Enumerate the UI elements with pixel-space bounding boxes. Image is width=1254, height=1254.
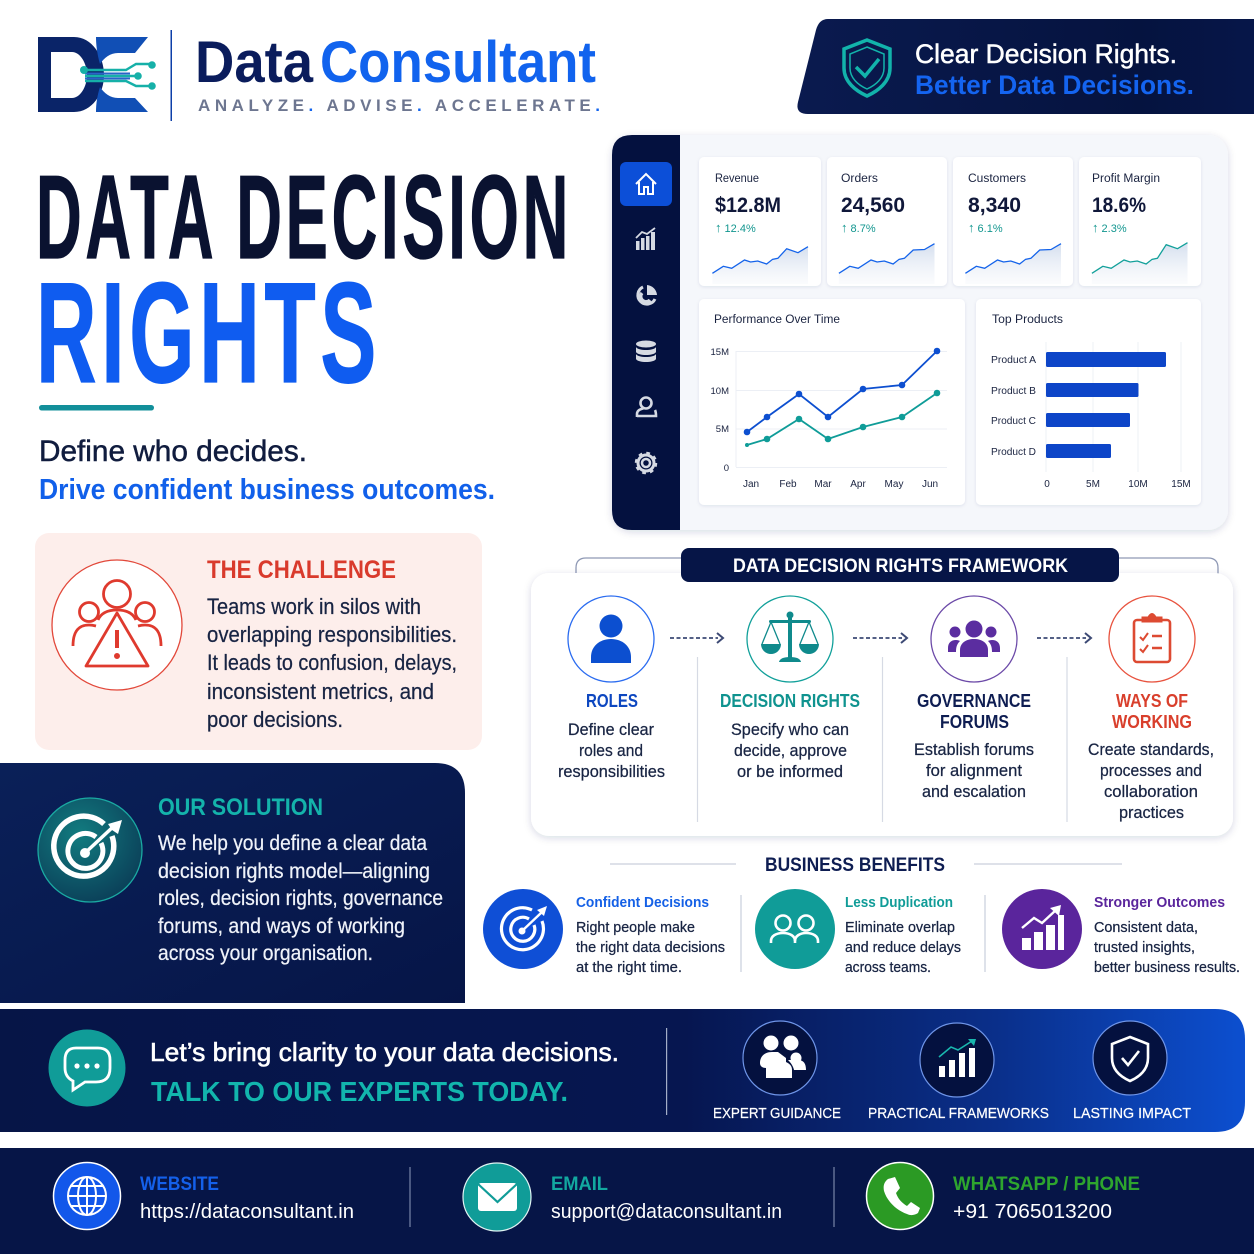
contact: email: EMAIL bbox=[551, 1174, 608, 1195]
bar chart: top products: 15M bbox=[1171, 479, 1191, 490]
bar chart: top products: 10M bbox=[1128, 479, 1148, 490]
card: customers bbox=[953, 157, 1073, 286]
bar chart: top products: Product A bbox=[991, 355, 1036, 366]
contact: website bbox=[54, 1162, 354, 1230]
benefit: less duplication: and reduce delays bbox=[845, 940, 961, 956]
panel: dashboard bbox=[612, 135, 1228, 530]
benefits heading: BUSINESS BENEFITS bbox=[765, 854, 945, 876]
step: governance forums: for alignment bbox=[926, 761, 1022, 780]
benefit: stronger outcomes: trusted insights, bbox=[1094, 940, 1195, 956]
line chart: performance over time: Mar bbox=[814, 479, 832, 490]
contact: whatsapp phone: +91 7065013200 bbox=[953, 1201, 1112, 1223]
framework title: DATA DECISION RIGHTS FRAMEWORK bbox=[733, 555, 1068, 577]
card: customers: 8,340 bbox=[968, 194, 1021, 217]
logo wordmark bbox=[195, 30, 596, 95]
solution heading: OUR SOLUTION bbox=[158, 794, 323, 821]
line chart: performance over time: Feb bbox=[779, 479, 797, 490]
logo wordmark: Consultant bbox=[320, 30, 596, 95]
step: ways of working bbox=[1088, 596, 1214, 822]
benefit: confident decisions: Right people make bbox=[576, 920, 695, 936]
main title bbox=[36, 151, 572, 413]
benefit: less duplication bbox=[755, 889, 961, 976]
badge: clear decision rights bbox=[797, 19, 1254, 114]
step: governance forums: FORUMS bbox=[940, 712, 1009, 732]
benefit: stronger outcomes: Consistent data, bbox=[1094, 920, 1198, 936]
call to action text: Let’s bring clarity to your data decisions. bbox=[150, 1037, 619, 1067]
bar chart: top products: Product B bbox=[991, 386, 1036, 397]
benefit: confident decisions: the right data decisions bbox=[576, 940, 725, 956]
footer: contact bbox=[0, 1148, 1254, 1254]
step: ways of working: WAYS OF bbox=[1116, 691, 1188, 711]
logo: Data Consultant bbox=[38, 30, 600, 121]
subtitle bbox=[39, 435, 495, 506]
benefit: confident decisions: at the right time. bbox=[576, 960, 682, 976]
line chart: performance over time: 15M bbox=[711, 347, 729, 358]
line chart: performance over time: 5M bbox=[716, 424, 729, 435]
framework title bbox=[681, 548, 1119, 582]
step: decision rights: or be informed bbox=[737, 762, 843, 781]
logo wordmark: Data bbox=[195, 30, 314, 95]
icon: home bbox=[636, 174, 656, 194]
benefit: less duplication: Eliminate overlap bbox=[845, 920, 955, 936]
subtitle: Drive confident business outcomes. bbox=[39, 474, 495, 506]
benefit: less duplication: across teams. bbox=[845, 960, 931, 976]
feature: lasting impact: LASTING IMPACT bbox=[1073, 1106, 1191, 1122]
contact: website: https://dataconsultant.in bbox=[140, 1201, 354, 1223]
line chart: performance over time: May bbox=[885, 479, 903, 490]
solution text: forums, and ways of working bbox=[158, 915, 405, 938]
solution text: roles, decision rights, governance bbox=[158, 887, 443, 910]
dashboard sidebar bbox=[612, 135, 680, 530]
call to action text bbox=[150, 1037, 619, 1107]
contact: website: WEBSITE bbox=[140, 1174, 219, 1195]
card: orders: ↑ 8.7% bbox=[841, 220, 876, 235]
step: decision rights: Specify who can bbox=[731, 720, 849, 739]
card: profit margin: ↑ 2.3% bbox=[1092, 220, 1127, 235]
bar chart: top products: 5M bbox=[1086, 479, 1100, 490]
challenge text: inconsistent metrics, and bbox=[207, 679, 434, 704]
benefit: stronger outcomes bbox=[1002, 889, 1240, 976]
logo tagline: ANALYZE . ADVISE . ACCELERATE . bbox=[198, 96, 600, 115]
benefit: confident decisions bbox=[483, 889, 725, 976]
step: ways of working: Create standards, bbox=[1088, 740, 1214, 759]
line chart: performance over time: Jun bbox=[922, 479, 938, 490]
icon: database bbox=[636, 340, 656, 362]
benefit: confident decisions: Confident Decisions bbox=[576, 895, 709, 911]
step: governance forums: and escalation bbox=[922, 782, 1026, 801]
step: ways of working: WORKING bbox=[1112, 712, 1192, 732]
step: roles: ROLES bbox=[586, 691, 638, 711]
step: governance forums: Establish forums bbox=[914, 740, 1034, 759]
card: revenue: $12.8M bbox=[715, 194, 781, 217]
step: ways of working: collaboration bbox=[1104, 782, 1198, 801]
step: ways of working: processes and bbox=[1100, 761, 1202, 780]
icon: bar chart bbox=[636, 228, 655, 250]
bar chart: top products: Product D bbox=[991, 447, 1036, 458]
call to action text: TALK TO OUR EXPERTS TODAY. bbox=[151, 1076, 568, 1107]
line chart: performance over time: 10M bbox=[711, 386, 729, 397]
step: decision rights: decide, approve bbox=[734, 741, 847, 760]
benefit: stronger outcomes: better business results. bbox=[1094, 960, 1240, 976]
bar chart: top products: Top Products bbox=[992, 314, 1063, 326]
main title: RIGHTS bbox=[36, 254, 381, 413]
challenge text: overlapping responsibilities. bbox=[207, 622, 457, 647]
badge text bbox=[915, 39, 1194, 100]
benefit: less duplication: Less Duplication bbox=[845, 895, 953, 911]
icon: target bbox=[38, 798, 142, 902]
card: profit margin: Profit Margin bbox=[1092, 173, 1160, 185]
challenge text bbox=[207, 594, 457, 732]
solution text: decision rights model—aligning bbox=[158, 860, 430, 883]
line chart: performance over time: Jan bbox=[743, 479, 759, 490]
icon: DC monogram bbox=[38, 37, 156, 112]
feature: practical frameworks bbox=[868, 1023, 1049, 1122]
section: business benefits bbox=[483, 854, 1240, 976]
step: roles: roles and bbox=[579, 741, 643, 760]
challenge text: It leads to confusion, delays, bbox=[207, 650, 457, 675]
step: roles bbox=[558, 596, 665, 781]
step: governance forums bbox=[914, 596, 1034, 801]
feature: expert guidance: EXPERT GUIDANCE bbox=[713, 1106, 841, 1122]
badge text: Better Data Decisions. bbox=[915, 70, 1194, 100]
card: revenue bbox=[699, 157, 821, 286]
card: revenue: ↑ 12.4% bbox=[715, 220, 756, 235]
card: customers: Customers bbox=[968, 173, 1026, 185]
panel: framework bbox=[531, 548, 1233, 836]
solution text bbox=[158, 832, 443, 965]
feature: practical frameworks: PRACTICAL FRAMEWORKS bbox=[868, 1106, 1049, 1122]
bar chart: top products bbox=[976, 299, 1201, 505]
card: revenue: Revenue bbox=[715, 173, 759, 185]
benefit: stronger outcomes: Stronger Outcomes bbox=[1094, 895, 1225, 911]
arrows between steps bbox=[670, 633, 1091, 643]
step: governance forums: GOVERNANCE bbox=[917, 691, 1031, 711]
line chart: performance over time: Performance Over Time bbox=[714, 314, 840, 326]
bar chart: top products: 0 bbox=[1044, 479, 1050, 490]
panel: the challenge bbox=[35, 533, 482, 750]
challenge heading: THE CHALLENGE bbox=[207, 556, 396, 584]
icon: chat bubble bbox=[48, 1030, 126, 1106]
line chart: performance over time: Apr bbox=[850, 479, 866, 490]
banner: call to action bbox=[0, 1009, 1245, 1132]
line chart: performance over time: 0 bbox=[724, 463, 729, 474]
challenge text: Teams work in silos with bbox=[207, 594, 421, 619]
icon: user bbox=[637, 398, 656, 417]
feature: lasting impact bbox=[1073, 1021, 1191, 1122]
step: roles: responsibilities bbox=[558, 762, 665, 781]
subtitle: Define who decides. bbox=[39, 435, 307, 468]
card: orders: Orders bbox=[841, 173, 878, 185]
solution text: We help you define a clear data bbox=[158, 832, 427, 855]
step: decision rights: DECISION RIGHTS bbox=[720, 691, 860, 711]
main title: DATA DECISION bbox=[36, 151, 572, 284]
card: customers: ↑ 6.1% bbox=[968, 220, 1003, 235]
card: orders bbox=[827, 157, 947, 286]
badge text: Clear Decision Rights. bbox=[915, 39, 1177, 69]
feature: expert guidance bbox=[713, 1021, 841, 1122]
step: roles: Define clear bbox=[568, 720, 654, 739]
contact: whatsapp phone: WHATSAPP / PHONE bbox=[953, 1174, 1140, 1195]
line chart: performance over time bbox=[699, 299, 965, 505]
card: profit margin: 18.6% bbox=[1092, 194, 1146, 217]
contact: whatsapp phone bbox=[866, 1162, 1140, 1230]
contact: email bbox=[463, 1163, 782, 1231]
challenge text: poor decisions. bbox=[207, 707, 343, 732]
card: profit margin bbox=[1079, 157, 1201, 286]
icon: pie chart bbox=[638, 285, 657, 304]
contact: email: support@dataconsultant.in bbox=[551, 1201, 782, 1223]
icon: gear bbox=[636, 454, 656, 472]
step: ways of working: practices bbox=[1119, 803, 1184, 822]
bar chart: top products: Product C bbox=[991, 416, 1036, 427]
panel: our solution bbox=[0, 763, 465, 1003]
icon: shield check bbox=[844, 40, 890, 96]
step: decision rights bbox=[720, 596, 860, 781]
icon: team with warning bbox=[73, 580, 161, 666]
card: orders: 24,560 bbox=[841, 194, 905, 217]
solution text: across your organisation. bbox=[158, 942, 373, 965]
